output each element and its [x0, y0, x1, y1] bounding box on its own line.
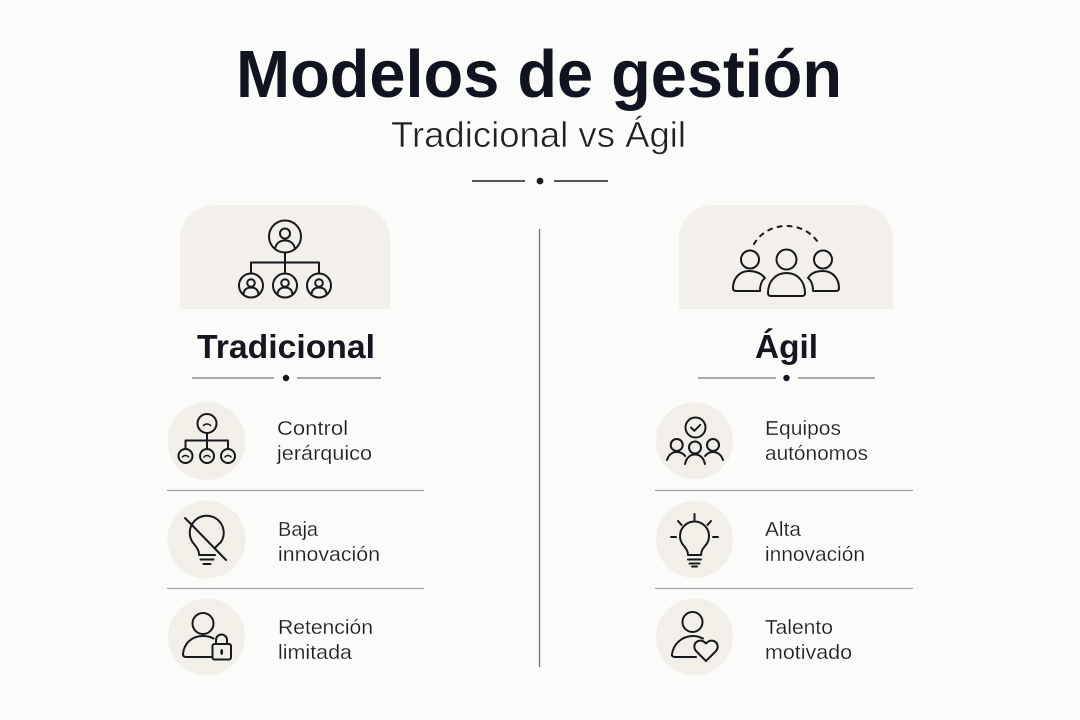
subtitle: Tradicional vs Ágil — [391, 114, 686, 155]
icon: lit bulb — [671, 514, 718, 566]
item: Alta innovación — [656, 501, 865, 578]
label: Control — [277, 418, 348, 440]
icon panel: hierarchy — [180, 205, 390, 309]
item: Baja innovación — [168, 500, 380, 578]
central divider — [538, 229, 540, 667]
icon: crossed-out bulb — [185, 516, 226, 564]
heading: Ágil: Ágil — [755, 328, 818, 365]
title: Modelos de gestión — [236, 37, 842, 112]
label: Talento — [765, 617, 833, 639]
header divider — [472, 178, 608, 184]
label: Equipos — [765, 418, 841, 440]
label: innovación — [278, 544, 380, 566]
icon: hierarchy — [178, 414, 235, 463]
item: Talento motivado — [656, 598, 852, 676]
heading: Tradicional: Tradicional — [197, 328, 375, 365]
panel: Ágil — [655, 205, 913, 676]
heading divider — [192, 375, 381, 381]
icon: person with lock — [183, 613, 231, 660]
icon: person with heart — [672, 612, 718, 661]
item: Equipos autónomos — [656, 402, 868, 480]
item: Retención limitada — [168, 598, 373, 676]
label: innovación — [765, 544, 865, 566]
label: limitada — [278, 642, 353, 664]
heading divider — [698, 375, 875, 381]
icon panel: team — [679, 205, 893, 309]
label: motivado — [765, 642, 852, 664]
icon: team with check — [667, 418, 723, 464]
label: Alta — [765, 519, 802, 541]
label: Baja — [278, 519, 319, 541]
label: jerárquico — [276, 443, 372, 465]
label: autónomos — [765, 443, 868, 465]
item: Control jerárquico — [168, 402, 372, 480]
label: Retención — [278, 617, 373, 639]
panel: Tradicional — [167, 205, 424, 676]
